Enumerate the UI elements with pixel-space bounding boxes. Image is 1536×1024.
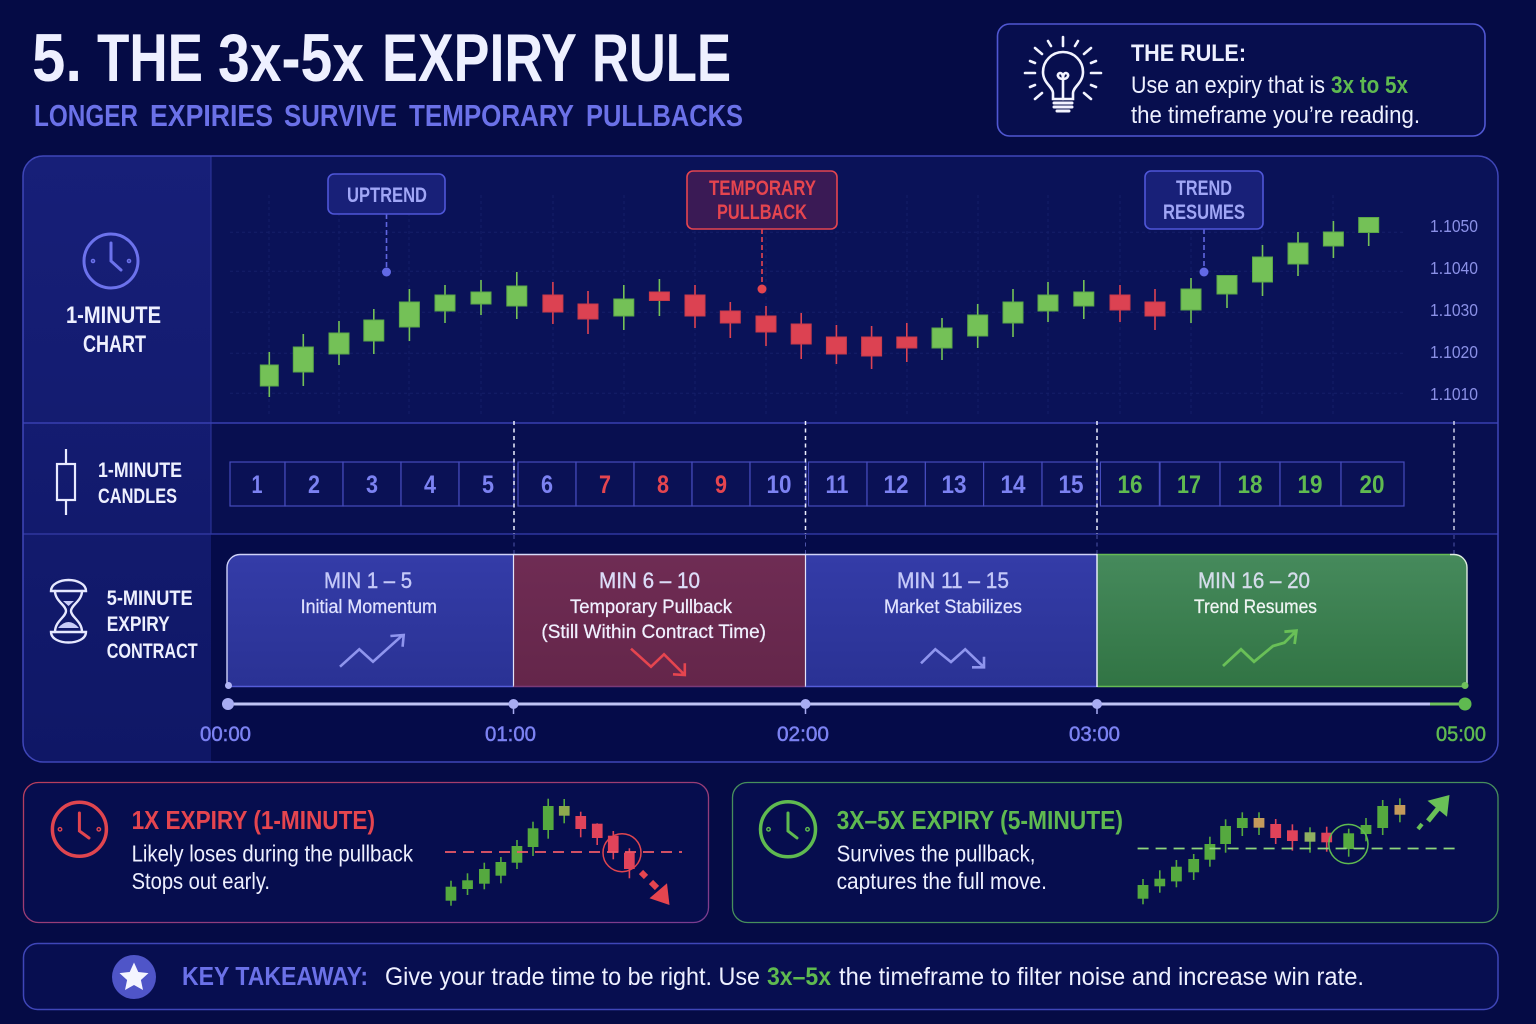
icon: candle bbox=[57, 449, 75, 515]
numbered minute cells: 12 bbox=[884, 471, 908, 499]
price axis labels: 1.1030 bbox=[1430, 300, 1478, 320]
panel: 1x expiry bbox=[24, 782, 708, 922]
panel: key takeaway bbox=[24, 944, 1498, 1010]
numbered minute cells: 2 bbox=[308, 471, 320, 499]
callout: trend resumes bbox=[1145, 171, 1263, 276]
icon: hourglass bbox=[51, 580, 86, 642]
numbered minute cells: 19 bbox=[1298, 471, 1322, 499]
title: EXPIRY bbox=[382, 20, 577, 96]
title: 5. bbox=[32, 20, 82, 96]
timeline: 00:00 bbox=[200, 723, 251, 746]
marker circle bbox=[603, 834, 641, 872]
numbered minute cells: 20 bbox=[1360, 471, 1384, 499]
contract segment: minutes 1-5: MIN 1 – 5 bbox=[324, 568, 412, 593]
icon: sideways arrow bbox=[921, 649, 984, 667]
numbered minute cells: 17 bbox=[1177, 471, 1201, 499]
row label: 1-minute chart bbox=[66, 234, 161, 358]
takeaway sentence: Give your trade time to be right. Use bbox=[385, 963, 760, 991]
timeline: 05:00 bbox=[1436, 723, 1486, 746]
rule text line 1: 3x to 5x bbox=[1331, 72, 1409, 99]
numbered minute cells: 6 bbox=[541, 471, 553, 499]
panel: main chart and timeline bbox=[23, 156, 1498, 762]
heading: 1X EXPIRY (1-MINUTE) bbox=[132, 805, 375, 835]
numbered minute cells bbox=[230, 462, 1404, 506]
chart grid bbox=[230, 195, 1405, 415]
row label: 1-minute candles: 1-MINUTE bbox=[98, 459, 182, 482]
numbered minute cells: 9 bbox=[715, 471, 727, 499]
numbered minute cells: 15 bbox=[1058, 471, 1084, 499]
contract segment: minutes 6-10 bbox=[514, 554, 806, 687]
numbered minute cells: 11 bbox=[826, 471, 849, 499]
timeline: 02:00 bbox=[777, 723, 829, 746]
dashed support level bbox=[1138, 848, 1460, 850]
icon: rising arrow bbox=[340, 635, 404, 667]
callout: temporary pullback: PULLBACK bbox=[717, 201, 807, 224]
row label: 1-minute candles: CANDLES bbox=[98, 485, 177, 508]
title: RULE bbox=[592, 20, 731, 96]
dashed minute markers bbox=[514, 421, 1454, 554]
callout: temporary pullback bbox=[687, 171, 837, 294]
title: THE bbox=[97, 20, 203, 96]
row label: 1-minute chart: CHART bbox=[83, 331, 146, 358]
numbered minute cells: 16 bbox=[1118, 471, 1142, 499]
contract segment: minutes 11-15: MIN 11 – 15 bbox=[897, 568, 1009, 593]
contract segment: minutes 11-15 bbox=[806, 554, 1097, 687]
icon: light bulb bbox=[1025, 37, 1101, 111]
panel: 3x-5x expiry bbox=[732, 782, 1498, 922]
callout: temporary pullback: TEMPORARY bbox=[709, 177, 816, 200]
panel: the rule bbox=[998, 24, 1485, 136]
contract segment: minutes 11-15: Market Stabilizes bbox=[884, 597, 1022, 618]
dashed stop level bbox=[445, 851, 682, 853]
numbered minute cells: 18 bbox=[1238, 471, 1263, 499]
price axis labels: 1.1050 bbox=[1430, 216, 1478, 236]
numbered minute cells: 5 bbox=[482, 471, 494, 499]
rule heading: THE RULE: bbox=[1131, 40, 1246, 67]
body text: Stops out early. bbox=[132, 868, 270, 894]
callout: uptrend bbox=[328, 174, 445, 276]
contract segment: minutes 1-5 bbox=[225, 554, 514, 689]
contract segment: minutes 16-20: Trend Resumes bbox=[1194, 597, 1317, 618]
row label: 5-minute expiry contract bbox=[51, 580, 198, 663]
row label: 5-minute expiry contract: EXPIRY bbox=[107, 613, 170, 636]
price axis labels: 1.1040 bbox=[1430, 258, 1478, 278]
icon: clock bbox=[84, 234, 138, 288]
callout: trend resumes: RESUMES bbox=[1163, 201, 1245, 224]
numbered minute cells: 7 bbox=[599, 471, 611, 499]
body text: Survives the pullback, bbox=[837, 840, 1036, 866]
body text: Likely loses during the pullback bbox=[132, 840, 413, 866]
numbered minute cells: 14 bbox=[1000, 471, 1026, 499]
rule text line 1: Use an expiry that is bbox=[1131, 72, 1325, 99]
numbered minute cells: 1 bbox=[252, 471, 263, 499]
numbered minute cells: 4 bbox=[424, 471, 436, 499]
numbered minute cells: 10 bbox=[766, 471, 792, 499]
callout: trend resumes: TREND bbox=[1176, 177, 1232, 200]
subtitle: EXPIRIES bbox=[150, 98, 273, 133]
icon: red clock bbox=[52, 802, 106, 856]
title bbox=[32, 20, 731, 96]
icon: star badge bbox=[112, 955, 156, 999]
callout: uptrend: UPTREND bbox=[347, 184, 427, 207]
mini chart: early stop out bbox=[446, 799, 635, 906]
rule text line 2: the timeframe you’re reading. bbox=[1131, 102, 1420, 129]
numbered minute cells: 8 bbox=[657, 471, 669, 499]
takeaway label: KEY TAKEAWAY: bbox=[182, 961, 368, 991]
contract segment: minutes 1-5: Initial Momentum bbox=[301, 597, 437, 618]
body text bbox=[132, 840, 413, 894]
icon: trend arrow bbox=[1223, 631, 1296, 666]
row label: 5-minute expiry contract: 5-MINUTE bbox=[107, 587, 193, 610]
icon: falling arrow bbox=[631, 649, 685, 675]
row label: 5-minute expiry contract: CONTRACT bbox=[107, 640, 198, 663]
takeaway sentence: 3x–5x bbox=[767, 963, 831, 991]
subtitle: SURVIVE bbox=[284, 98, 397, 133]
timeline: 03:00 bbox=[1069, 723, 1120, 746]
contract segment: minutes 16-20 bbox=[1097, 554, 1468, 689]
takeaway sentence: the timeframe to filter noise and increase win rate. bbox=[839, 963, 1364, 991]
timeline: 01:00 bbox=[485, 723, 536, 746]
row label: 1-minute candles bbox=[57, 449, 182, 515]
price axis labels: 1.1010 bbox=[1430, 384, 1478, 404]
arrow: up bbox=[1418, 795, 1450, 829]
contract segment: minutes 6-10: MIN 6 – 10 bbox=[599, 568, 700, 593]
price axis labels bbox=[1430, 216, 1478, 404]
subtitle bbox=[34, 98, 743, 133]
numbered minute cells: 3 bbox=[366, 471, 378, 499]
row label: 1-minute chart: 1-MINUTE bbox=[66, 302, 161, 329]
subtitle: TEMPORARY bbox=[409, 98, 574, 133]
icon: green clock bbox=[760, 802, 816, 857]
timeline bbox=[200, 698, 1486, 746]
body text: captures the full move. bbox=[837, 868, 1047, 894]
marker circle bbox=[1329, 824, 1368, 864]
body text bbox=[837, 840, 1047, 894]
numbered minute cells: 13 bbox=[942, 471, 966, 499]
price axis labels: 1.1020 bbox=[1430, 342, 1478, 362]
title: 3x-5x bbox=[218, 20, 364, 96]
candlestick chart bbox=[260, 217, 1379, 397]
contract segment: minutes 6-10: (Still Within Contract Time) bbox=[541, 622, 766, 643]
contract segment: minutes 16-20: MIN 16 – 20 bbox=[1198, 568, 1310, 593]
mini chart: survives pullback bbox=[1138, 798, 1405, 904]
arrow: down bbox=[641, 872, 670, 905]
subtitle: LONGER bbox=[34, 98, 138, 133]
subtitle: PULLBACKS bbox=[586, 98, 743, 133]
heading: 3X–5X EXPIRY (5-MINUTE) bbox=[837, 805, 1123, 835]
contract segment: minutes 6-10: Temporary Pullback bbox=[570, 597, 732, 618]
takeaway sentence bbox=[385, 963, 1364, 991]
